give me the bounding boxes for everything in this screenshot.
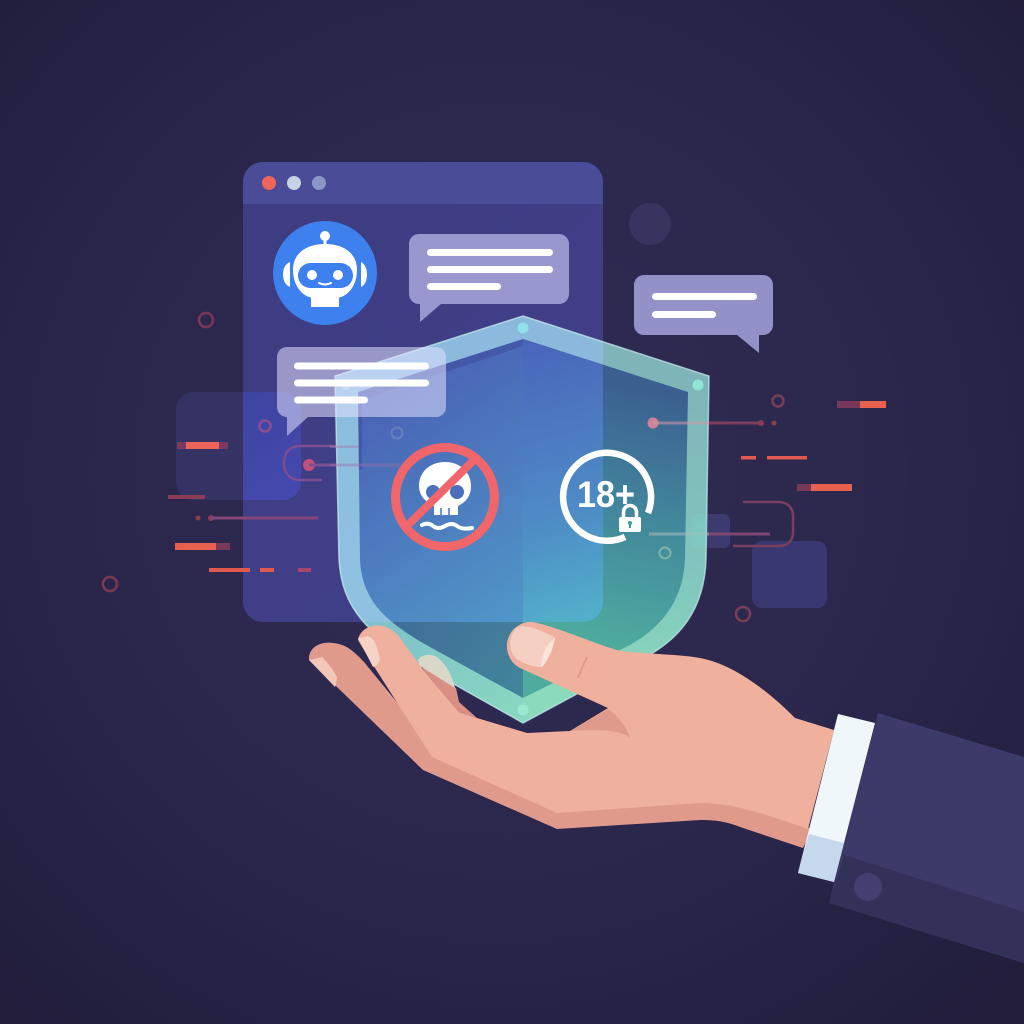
translucent square right (752, 541, 827, 608)
shirt cuff (798, 714, 875, 882)
decorative circle top right (629, 203, 671, 245)
chat bubble: user message over shield (277, 347, 446, 436)
window control dots (262, 176, 326, 190)
shield rivets (341, 322, 704, 716)
translucent square left (176, 392, 301, 500)
icon: 18+ age lock: 18+ (577, 474, 635, 515)
icon: robot avatar (273, 221, 377, 325)
finger seen through shield (418, 655, 455, 688)
padlock (619, 506, 641, 532)
hand (309, 622, 834, 848)
data streams left (103, 313, 400, 591)
icon: 18+ age lock (563, 453, 651, 541)
streams seen through shield (330, 418, 709, 558)
sleeve button (854, 873, 882, 901)
hand palm, index finger and thumb (358, 622, 834, 829)
shield rim (330, 310, 720, 732)
back fingernail (309, 657, 337, 687)
finger shadow under shield (422, 667, 477, 718)
hand underside and back finger (309, 643, 812, 848)
translucent small square right (692, 514, 730, 548)
index fingernail (358, 636, 380, 667)
shield face (358, 339, 688, 698)
panel: chat window (243, 162, 603, 622)
data streams right (700, 396, 886, 621)
icon: no harmful content (crossed-out skull) (396, 448, 494, 546)
jacket sleeve (829, 713, 1024, 963)
window title bar (243, 162, 603, 204)
chat bubble: right outer message (634, 275, 773, 353)
thumb web shadow (570, 709, 630, 738)
thumb knuckle crease (578, 657, 587, 678)
chat bubble: bot message (409, 234, 569, 322)
thumbnail (510, 626, 555, 667)
shield (330, 310, 720, 732)
